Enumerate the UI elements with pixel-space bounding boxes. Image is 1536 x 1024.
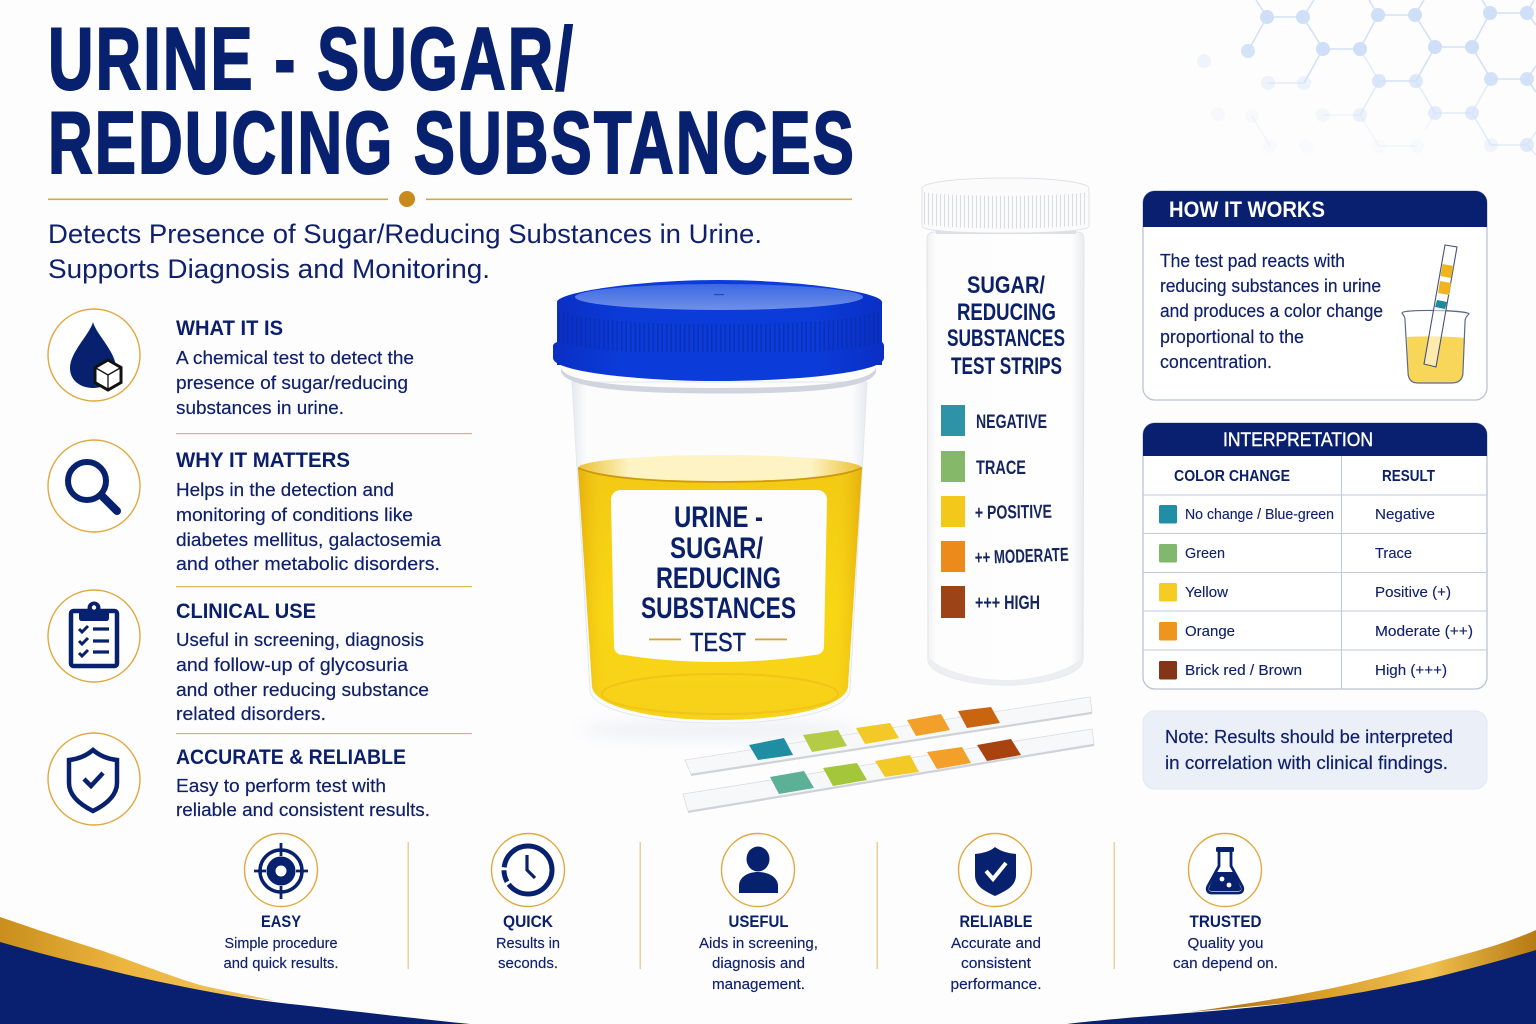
- strip two: [683, 729, 1094, 813]
- row: trace: [1159, 544, 1412, 562]
- bottle colour legend: [941, 405, 1069, 618]
- text: why it matters: and other metabolic disorders.: [176, 553, 440, 574]
- icon: shield check: [48, 733, 140, 825]
- bottle colour legend: TRACE: [976, 458, 1026, 479]
- bottle cap: [922, 178, 1089, 233]
- icon: person: [722, 834, 794, 906]
- text: quick: QUICK: [503, 912, 554, 931]
- how it works text: and produces a color change: [1160, 300, 1383, 321]
- cup label: REDUCING: [656, 562, 781, 595]
- text: why it matters: monitoring of conditions like: [176, 504, 413, 525]
- bottle title: SUGAR/: [967, 272, 1045, 299]
- how it works header: HOW IT WORKS: [1169, 197, 1325, 222]
- icon: drop with cube: [48, 309, 140, 401]
- text: reliable: [950, 912, 1042, 993]
- feature: quick: [492, 834, 564, 972]
- panel: why it matters: [48, 440, 442, 574]
- heading: clinical use: CLINICAL USE: [176, 600, 316, 623]
- text: clinical use: and follow-up of glycosuria: [176, 654, 409, 675]
- bottle title: TEST STRIPS: [951, 353, 1062, 380]
- text: useful: USEFUL: [728, 912, 788, 931]
- row: positive: Yellow: [1185, 585, 1229, 601]
- text: accurate and reliable: reliable and consistent results.: [176, 799, 430, 820]
- bottle title: [947, 272, 1065, 380]
- row: moderate: Orange: [1185, 624, 1235, 640]
- callout: note: [1143, 711, 1487, 789]
- how it works text: [1160, 250, 1383, 372]
- cup label: TEST: [690, 627, 746, 657]
- panel: accurate and reliable: [48, 733, 430, 825]
- text: why it matters: diabetes mellitus, galactosemia: [176, 529, 442, 550]
- text: useful: management.: [712, 976, 805, 993]
- row: high: High (+++): [1375, 663, 1447, 679]
- bottle title: REDUCING: [957, 299, 1056, 326]
- background: molecule hexagon pattern: [1197, 0, 1536, 155]
- row: high: Brick red / Brown: [1185, 663, 1302, 679]
- icon: clock: [492, 834, 564, 906]
- row: positive: [1159, 583, 1451, 602]
- column headings: [1174, 468, 1435, 485]
- panel: clinical use: [48, 590, 429, 724]
- bottle title: SUBSTANCES: [947, 325, 1065, 352]
- text: why it matters: Helps in the detection and: [176, 479, 394, 500]
- test strips on table: [683, 697, 1094, 813]
- subtitle: Supports Diagnosis and Monitoring.: [48, 254, 490, 284]
- footer wave: left: [0, 917, 470, 1024]
- text: clinical use: Useful in screening, diagnosis: [176, 629, 424, 650]
- row: high: [1159, 661, 1447, 680]
- icon: beaker with dipped strip: [1402, 245, 1469, 383]
- test strip bottle: [922, 178, 1089, 685]
- how it works text: concentration.: [1160, 351, 1272, 372]
- row: negative: Negative: [1375, 507, 1435, 523]
- text: useful: [699, 912, 818, 993]
- text: easy: EASY: [261, 912, 302, 931]
- text: what it is: presence of sugar/reducing: [176, 372, 408, 393]
- text: trusted: [1173, 912, 1278, 972]
- specimen cup: [553, 280, 884, 740]
- cup label: SUBSTANCES: [641, 592, 796, 625]
- interpretation header: INTERPRETATION: [1223, 430, 1373, 451]
- callout: note: Note: Results should be interpreted: [1165, 726, 1453, 747]
- text: useful: diagnosis and: [712, 955, 805, 972]
- bottle colour legend: + POSITIVE: [975, 502, 1052, 524]
- subtitle: [48, 219, 762, 284]
- text: quick: [496, 912, 560, 972]
- interpretation header: [1143, 423, 1487, 456]
- cup label: [611, 490, 827, 662]
- text: trusted: Quality you: [1188, 935, 1264, 952]
- heading: accurate and reliable: ACCURATE & RELIABLE: [176, 746, 406, 769]
- text: clinical use: and other reducing substance: [176, 679, 429, 700]
- text: trusted: can depend on.: [1173, 955, 1278, 972]
- feature: easy: [224, 834, 338, 972]
- row: moderate: [1159, 622, 1473, 640]
- feature: useful: [699, 834, 818, 993]
- bottle colour legend: NEGATIVE: [976, 412, 1047, 433]
- panel: how it works: [1143, 191, 1487, 400]
- text: accurate and reliable: Easy to perform test with: [176, 775, 386, 796]
- title: REDUCING SUBSTANCES: [48, 93, 856, 192]
- text: reliable: performance.: [950, 976, 1042, 993]
- title: URINE - SUGAR/: [48, 9, 575, 108]
- panel: interpretation table: [1143, 423, 1487, 689]
- bottle colour legend: ++ MODERATE: [974, 545, 1069, 569]
- text: reliable: consistent: [961, 955, 1032, 972]
- text: trusted: TRUSTED: [1190, 912, 1262, 931]
- heading: why it matters: WHY IT MATTERS: [176, 449, 350, 472]
- row: negative: No change / Blue-green: [1185, 507, 1334, 523]
- cup lid: [553, 280, 884, 381]
- text: accurate and reliable: [176, 775, 430, 820]
- subtitle: Detects Presence of Sugar/Reducing Substances in Urine.: [48, 219, 762, 249]
- callout: note: in correlation with clinical findings.: [1165, 752, 1448, 773]
- panel: what it is: [48, 309, 414, 418]
- strip one: [685, 697, 1092, 776]
- title: [48, 9, 856, 192]
- text: clinical use: [176, 629, 429, 724]
- text: useful: Aids in screening,: [699, 935, 818, 952]
- column headings: COLOR CHANGE: [1174, 468, 1290, 485]
- cup label: URINE -: [674, 501, 763, 534]
- text: easy: Simple procedure: [224, 935, 338, 952]
- icon: magnifier: [48, 440, 140, 532]
- heading: what it is: WHAT IT IS: [176, 317, 283, 340]
- text: reliable: Accurate and: [951, 935, 1041, 952]
- text: quick: Results in: [496, 935, 560, 952]
- title divider: [48, 191, 852, 207]
- icon: target: [244, 834, 318, 906]
- icon: flask: [1188, 834, 1262, 906]
- text: quick: seconds.: [498, 955, 558, 972]
- text: what it is: [176, 347, 414, 418]
- cup label: SUGAR/: [670, 532, 764, 565]
- row: negative: [1159, 505, 1435, 524]
- bottle colour legend: +++ HIGH: [975, 593, 1040, 614]
- text: clinical use: related disorders.: [176, 703, 326, 724]
- how it works text: The test pad reacts with: [1160, 250, 1345, 271]
- text: easy: [224, 912, 338, 972]
- row: positive: Positive (+): [1375, 585, 1451, 601]
- feature: reliable: [950, 834, 1042, 993]
- column headings: RESULT: [1382, 468, 1435, 485]
- row: moderate: Moderate (++): [1375, 624, 1473, 640]
- icon: clipboard checklist: [48, 590, 140, 682]
- how it works header: [1143, 191, 1487, 227]
- text: why it matters: [176, 479, 442, 574]
- icon: filled shield: [958, 834, 1032, 906]
- text: reliable: RELIABLE: [960, 912, 1032, 931]
- text: what it is: A chemical test to detect the: [176, 347, 414, 368]
- footer wave: right: [1067, 930, 1536, 1024]
- row: trace: Green: [1185, 546, 1225, 562]
- how it works text: reducing substances in urine: [1160, 275, 1381, 296]
- how it works text: proportional to the: [1160, 326, 1304, 347]
- row: trace: Trace: [1375, 546, 1412, 562]
- text: what it is: substances in urine.: [176, 397, 344, 418]
- feature: trusted: [1173, 834, 1278, 972]
- text: easy: and quick results.: [224, 955, 338, 972]
